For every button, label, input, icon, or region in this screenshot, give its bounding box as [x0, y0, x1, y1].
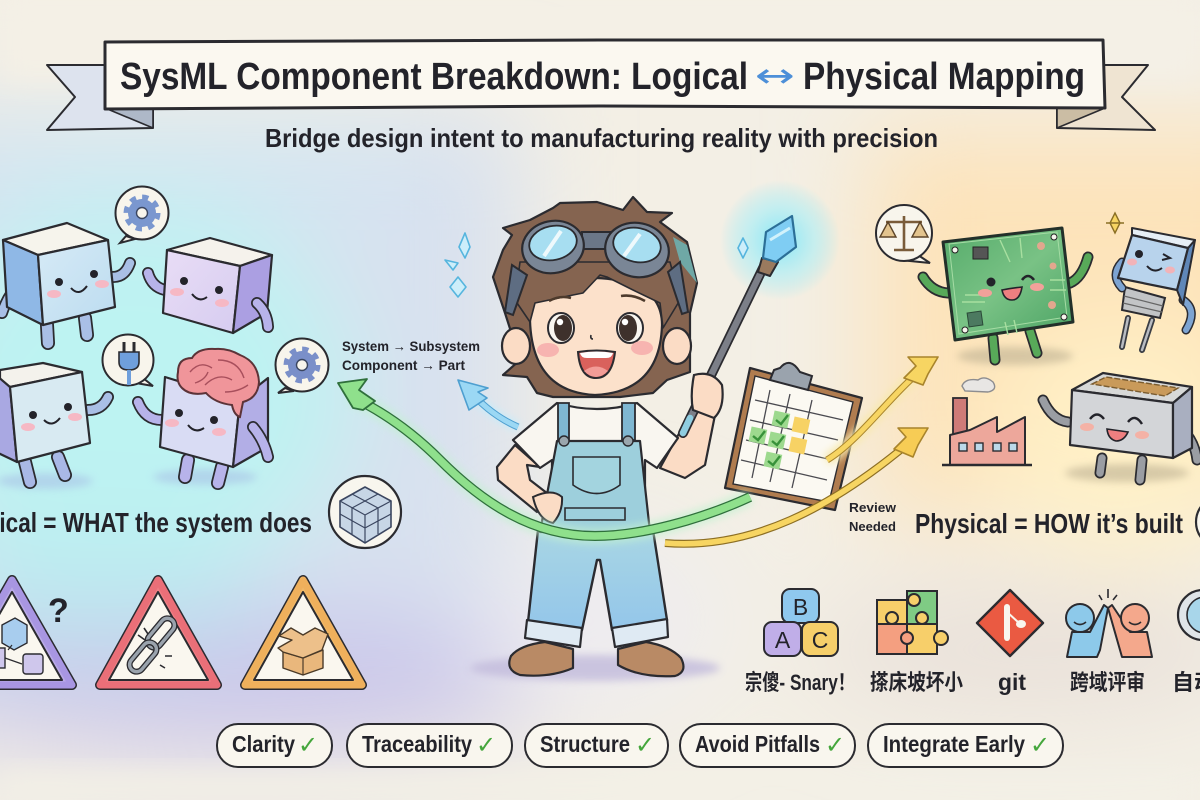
icon: high five: [1066, 589, 1152, 657]
cube: purple logical block: [148, 238, 272, 333]
trousers: [528, 530, 667, 630]
sparkles: left of character: [445, 233, 748, 297]
hand on wand: [692, 374, 723, 418]
cube: blue logical block: [2, 223, 130, 343]
fringe: [515, 262, 680, 328]
icon: ABC blocks: [764, 589, 838, 656]
title banner: Physical Mapping: [803, 56, 1085, 98]
speech bubble: scales: [876, 205, 932, 263]
icon: ABC blocks: B: [793, 594, 808, 620]
sparkle: yellow: [1106, 213, 1124, 233]
sensor character: [1116, 228, 1195, 350]
pill: Integrate Early: Integrate Early: [883, 731, 1025, 757]
warning: empty box: [245, 580, 362, 685]
speech bubble: gear: [116, 186, 168, 243]
arrow: yellow upper: [827, 357, 938, 460]
pill: Avoid Pitfalls: ✓: [825, 731, 845, 759]
title banner: SysML Component Breakdown: Logical: [120, 56, 748, 98]
icon labels: 搽床坡坏小: [870, 670, 963, 695]
wand: [683, 180, 840, 433]
hair back: [493, 197, 697, 397]
icon: git diamond: [977, 590, 1043, 656]
eyes and brows: [548, 296, 645, 343]
cheeks: [537, 341, 653, 357]
hand on hip: [533, 492, 562, 523]
panel: physical components: [876, 205, 1197, 482]
character: [470, 180, 840, 681]
hierarchy label: Component → Part: [342, 357, 465, 373]
chip character: [1043, 373, 1197, 482]
factory icon: [942, 378, 1032, 465]
boot: right: [618, 642, 683, 676]
review note: Needed: [849, 519, 896, 534]
clipboard checklist: [725, 363, 862, 510]
pill: Traceability: [347, 724, 512, 767]
shirt: [513, 403, 678, 520]
goggles: [505, 215, 688, 315]
arm: left: [497, 445, 552, 512]
hair: teal streak: [673, 237, 697, 283]
panel: logical cubes: [0, 186, 328, 489]
icon labels: 跨域评审: [1070, 670, 1145, 695]
panel: summary pills: [217, 724, 1063, 767]
icon: partial badge right: [1196, 496, 1200, 548]
boot: left: [509, 642, 573, 676]
icon: automation badge: [1178, 590, 1200, 640]
ground shadow: [470, 655, 720, 681]
warning: broken link: [100, 580, 217, 685]
speech bubble: plug: [102, 334, 154, 386]
face: [530, 278, 662, 395]
ear: right: [663, 328, 691, 364]
icon: brain: [178, 349, 259, 417]
overalls bib: [540, 403, 650, 532]
icon labels: 宗傻- Snary！: [745, 670, 855, 695]
pill: Structure: ✓: [635, 731, 655, 759]
review note: Review: [849, 500, 897, 515]
pill: Avoid Pitfalls: Avoid Pitfalls: [695, 731, 820, 757]
arrow: yellow lower: [665, 428, 928, 544]
speech bubble: gear 2: [276, 338, 328, 393]
title banner: ↔: [755, 56, 795, 96]
cuff: left: [525, 620, 582, 647]
warning: unclear hierarchy: [0, 580, 72, 685]
arm: right: [660, 410, 715, 478]
question mark: ?: [48, 592, 69, 630]
pill: Structure: Structure: [540, 731, 630, 757]
icon: ABC blocks: A: [775, 627, 791, 653]
arrow: blue to logical: [458, 380, 518, 427]
icon: ABC blocks: C: [812, 627, 828, 653]
icon: isometric cube badge: [329, 476, 401, 548]
cuff: right: [612, 619, 668, 647]
pill: Integrate Early: [868, 724, 1063, 767]
cube: brain logical block: [138, 349, 268, 485]
pill: Clarity: Clarity: [232, 731, 295, 757]
cube: pale logical block: [0, 363, 108, 489]
pill: Structure: [525, 724, 668, 767]
arrow: green to logical: [338, 379, 750, 536]
icon labels: [745, 669, 1200, 695]
pcb character: [923, 228, 1088, 365]
mouth: [578, 350, 615, 378]
subtitle: Bridge design intent to manufacturing reality with precision: [265, 123, 938, 153]
pill: Traceability: Traceability: [362, 731, 472, 757]
icon: puzzle: [877, 591, 948, 654]
title banner: [47, 40, 1155, 130]
review note: [849, 500, 897, 534]
pill: Avoid Pitfalls: [680, 724, 855, 767]
pill: Clarity: [217, 724, 332, 767]
pill: Clarity: ✓: [298, 731, 318, 759]
hierarchy label: [342, 338, 480, 373]
icon labels: git: [998, 669, 1026, 695]
panel: best practices icons: [745, 589, 1200, 695]
pill: Traceability: ✓: [476, 731, 496, 759]
panel: pitfall warnings: [0, 580, 362, 685]
hierarchy label: System → Subsystem: [342, 338, 480, 354]
pill: Integrate Early: ✓: [1030, 731, 1050, 759]
ear: left: [502, 328, 530, 364]
